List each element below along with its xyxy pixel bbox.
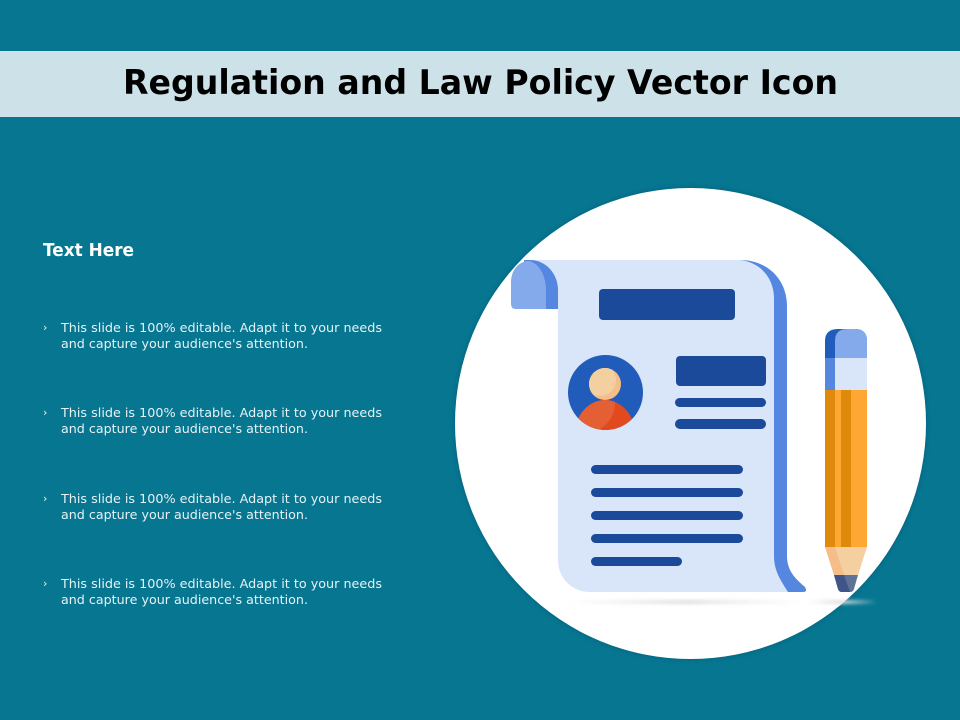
body text lines: [591, 465, 743, 566]
bullet 2: [43, 405, 382, 436]
icon: pencil: [825, 329, 867, 592]
scroll back edge: [740, 260, 806, 592]
bullet 2: and capture your audience's attention.: [61, 421, 308, 436]
ground shadows: [565, 600, 877, 604]
pencil barrel: [825, 390, 867, 547]
bullet 4: and capture your audience's attention.: [61, 592, 308, 607]
bullet 2: This slide is 100% editable. Adapt it to your needs: [60, 405, 382, 420]
graphite point: [834, 575, 858, 592]
bullet 3: This slide is 100% editable. Adapt it to your needs: [60, 491, 382, 506]
heading: text here: Text Here: [43, 240, 134, 261]
bullet 4: [43, 576, 382, 607]
bullet 1: and capture your audience's attention.: [61, 336, 308, 351]
detail lines: [675, 398, 766, 429]
title banner: [0, 51, 960, 117]
left text column: [43, 240, 382, 607]
title: Regulation and Law Policy Vector Icon: [123, 63, 838, 103]
bullet 3: ›: [43, 492, 47, 505]
bullet 1: [43, 320, 382, 351]
bullet 2: ›: [43, 406, 47, 419]
bullet 4: ›: [43, 577, 47, 590]
title bar: [599, 289, 735, 320]
wood tip: [825, 547, 867, 575]
eraser: [825, 329, 867, 358]
white circle panel: [454, 187, 927, 660]
paper sheet: [530, 260, 788, 592]
bullet 1: This slide is 100% editable. Adapt it to your needs: [60, 320, 382, 335]
name box: [676, 356, 766, 386]
icon: document scroll: [511, 260, 806, 592]
bullet 3: [43, 491, 382, 522]
scroll curl: [511, 260, 558, 309]
bullet 3: and capture your audience's attention.: [61, 507, 308, 522]
ferrule: [825, 358, 867, 390]
avatar: [568, 355, 643, 430]
bullet 1: ›: [43, 321, 47, 334]
bullet 4: This slide is 100% editable. Adapt it to your needs: [60, 576, 382, 591]
